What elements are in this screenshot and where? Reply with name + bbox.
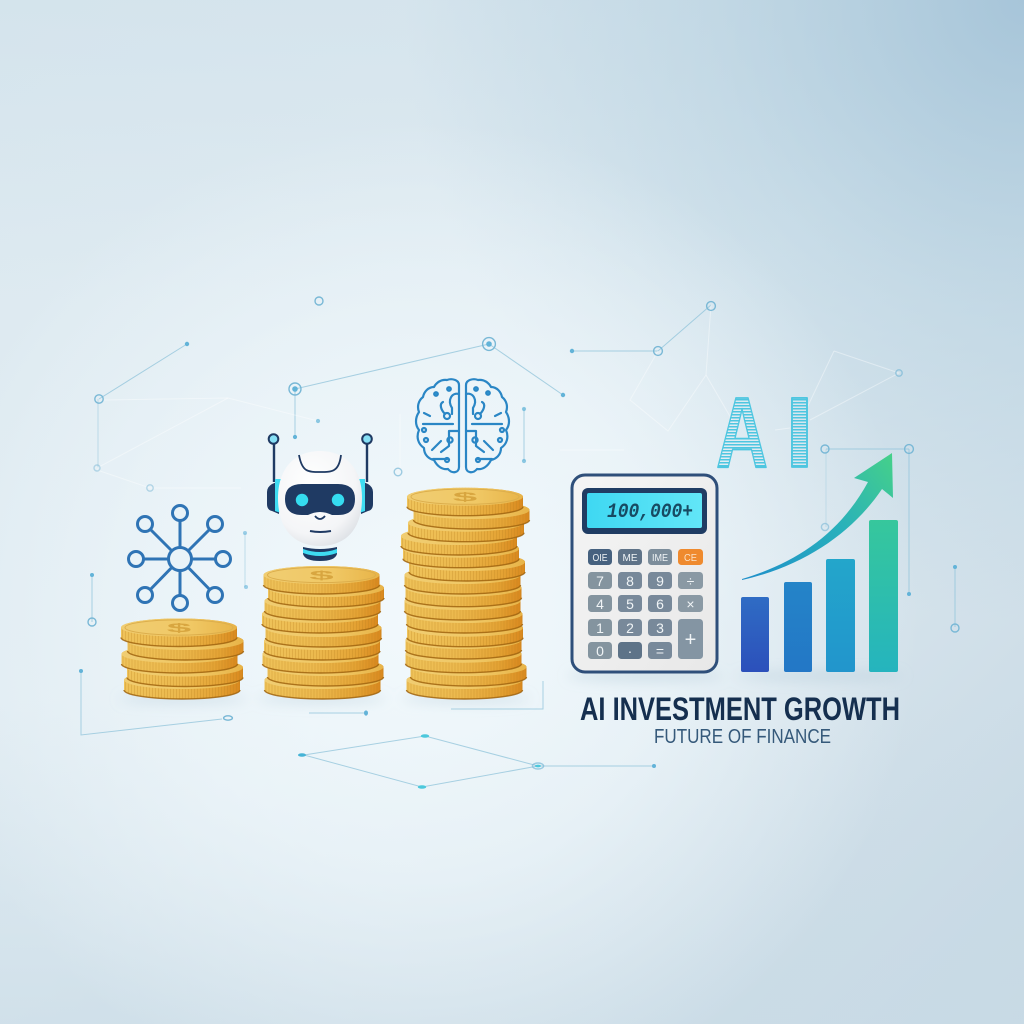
icon: circuit brain (416, 379, 509, 472)
subtitle: FUTURE OF FINANCE (654, 726, 831, 748)
calculator keys: IME (652, 553, 668, 564)
calculator keys: 9 (656, 573, 664, 589)
calculator keys: 7 (596, 573, 604, 589)
calculator display: 100,000+ (607, 501, 693, 524)
growth bar chart (741, 520, 898, 672)
coin stack: tall (401, 488, 530, 699)
coin stack: small (121, 618, 244, 699)
calculator keys: · (628, 643, 632, 659)
calculator keys: CE (684, 553, 697, 564)
calculator keys: × (686, 596, 695, 612)
calculator keys: 0 (596, 643, 604, 659)
growth arrow (742, 453, 893, 580)
calculator display (582, 488, 707, 534)
floor shadows under stacks (119, 670, 904, 704)
calculator keys: + (685, 629, 696, 651)
calculator keys: 2 (626, 620, 634, 636)
calculator keys (588, 549, 703, 659)
network lines and nodes (79, 297, 959, 789)
calculator (572, 475, 717, 672)
title: AI INVESTMENT GROWTH (580, 691, 900, 727)
calculator keys: 1 (596, 620, 604, 636)
calculator keys: ME (622, 553, 638, 564)
calculator keys: ÷ (687, 573, 695, 589)
coin stack: medium (262, 566, 384, 699)
icon: robot head (267, 434, 373, 561)
calculator keys: 3 (656, 620, 664, 636)
AI striped logo: I (785, 377, 814, 489)
calculator keys: 5 (626, 596, 634, 612)
calculator keys: 4 (596, 596, 604, 612)
AI striped logo: A (716, 377, 768, 489)
icon: hub network (128, 506, 230, 610)
calculator keys: 6 (656, 596, 664, 612)
calculator keys: 8 (626, 573, 634, 589)
calculator keys: = (656, 643, 664, 659)
calculator keys: OIE (592, 553, 608, 564)
